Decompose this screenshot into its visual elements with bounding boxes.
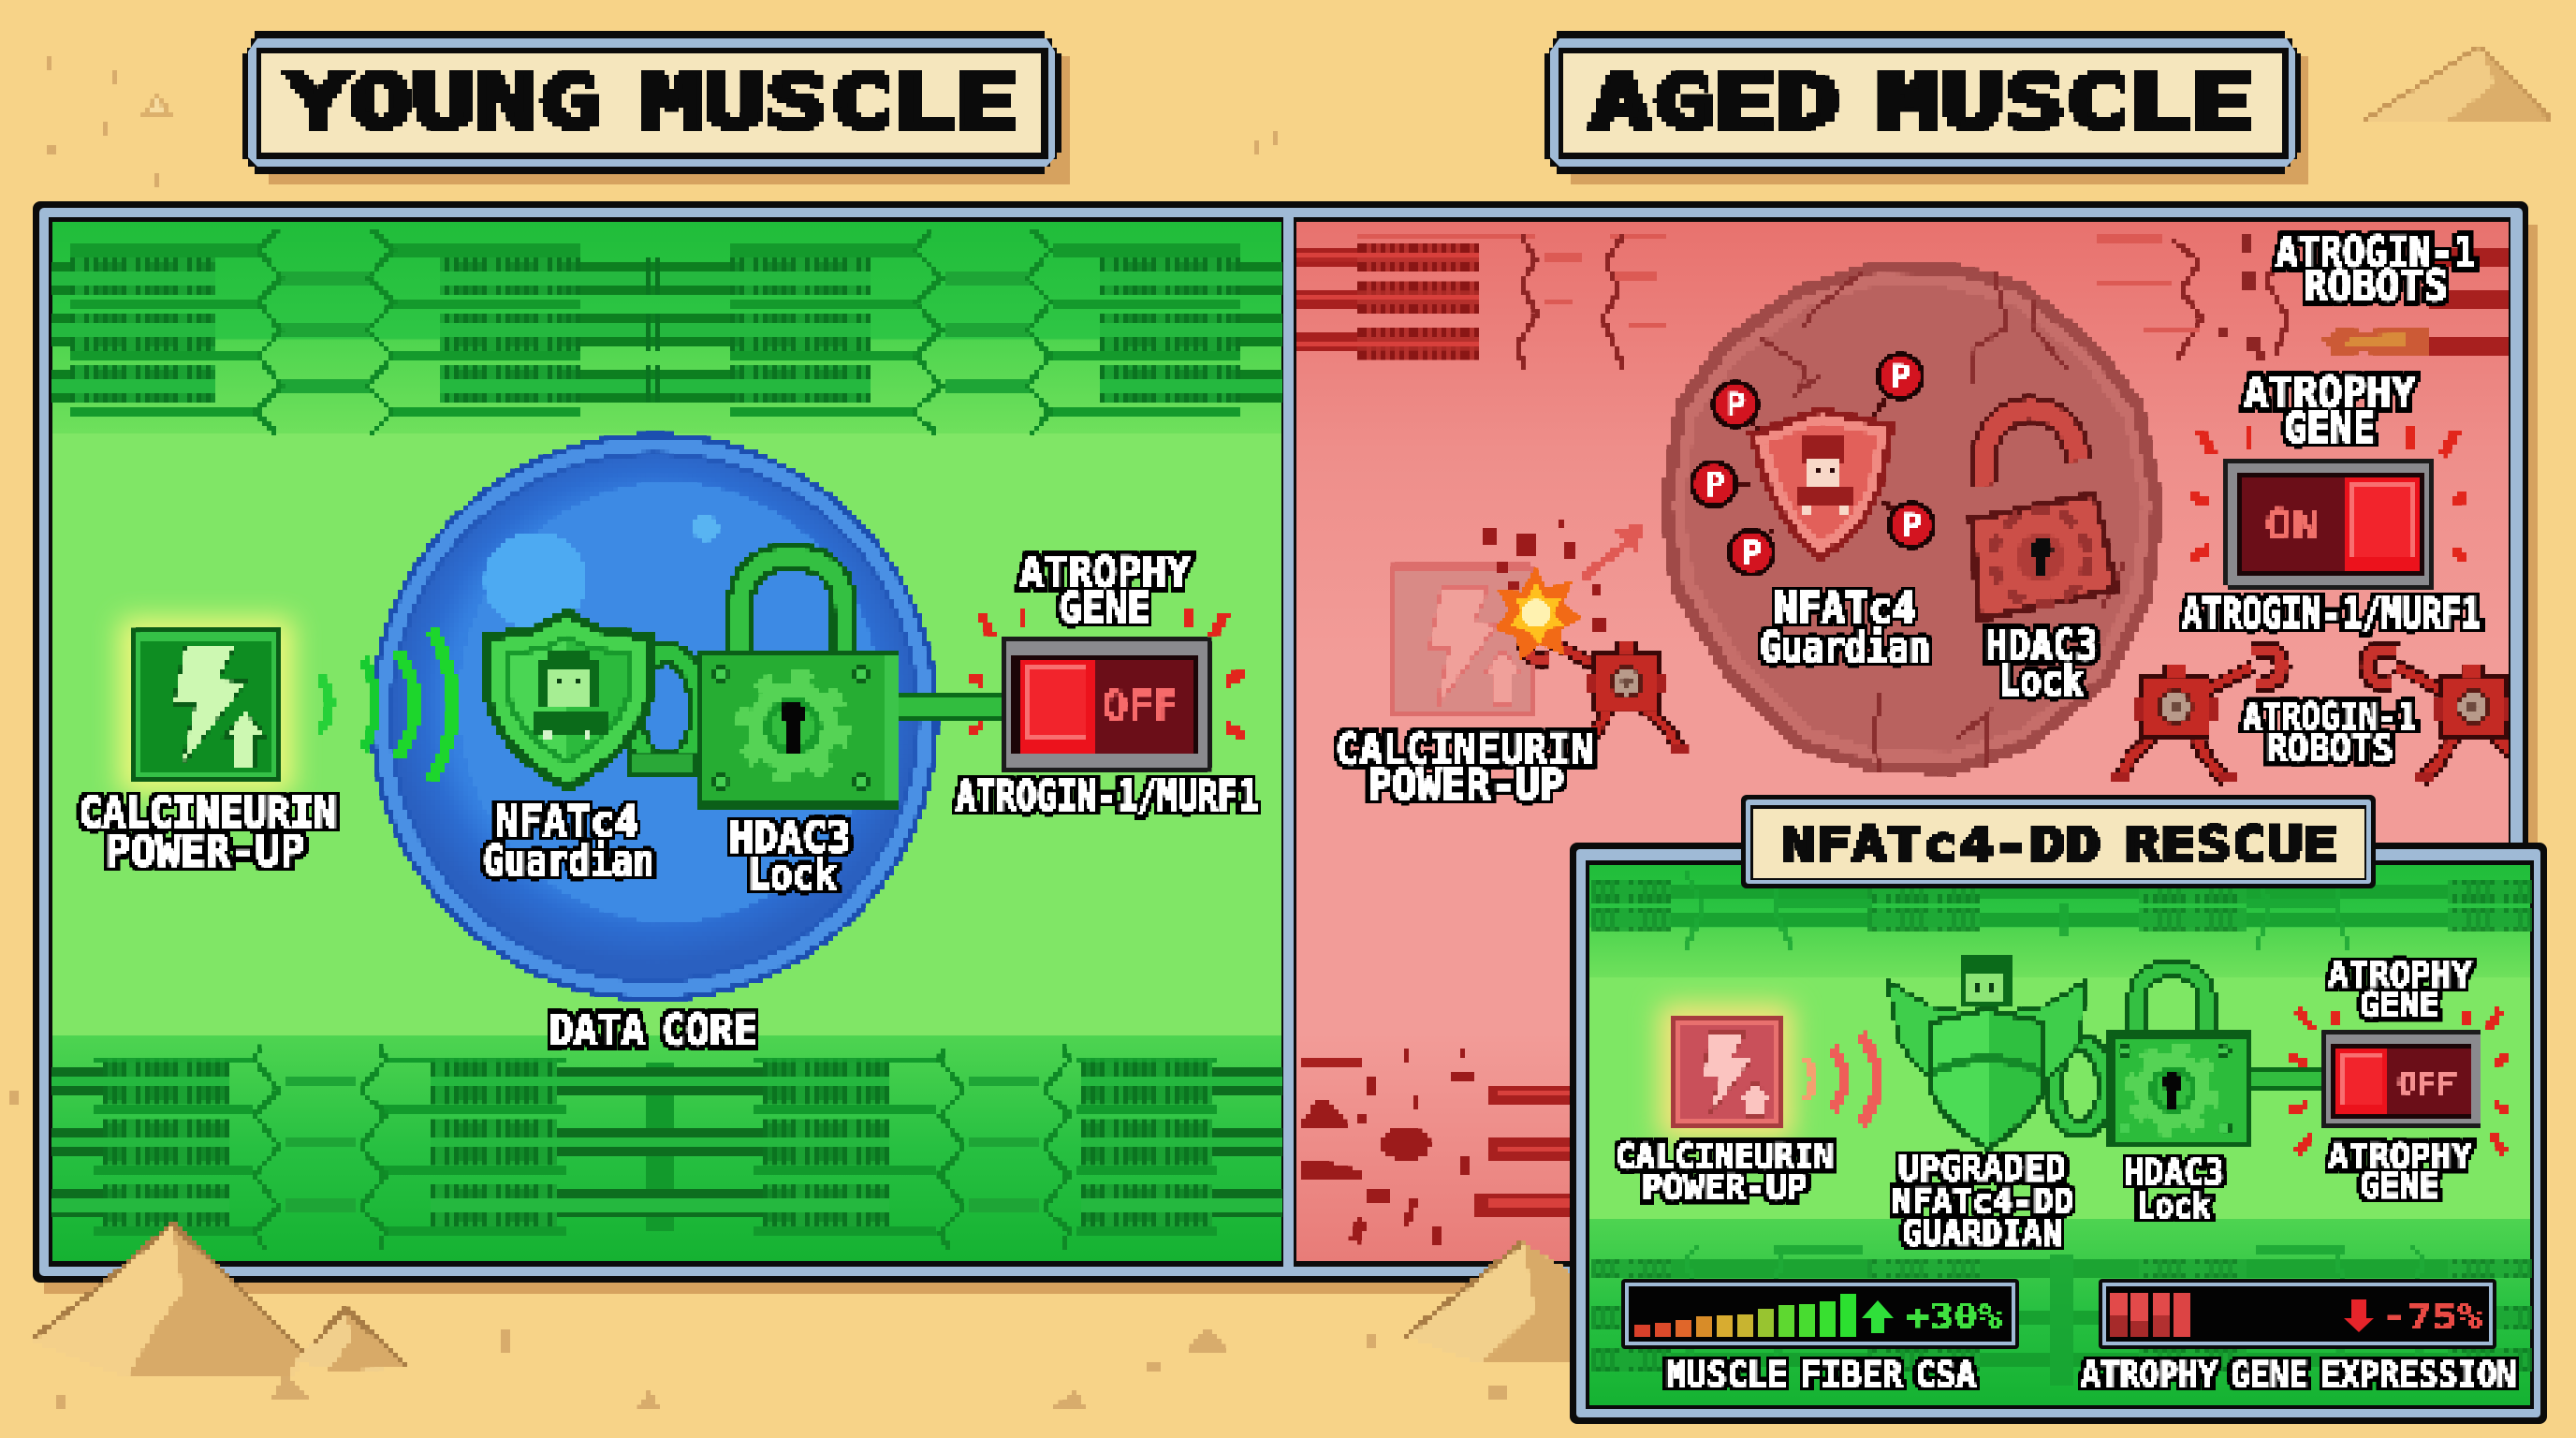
shield [1927,1006,2047,1152]
rescue calcineurin icon [1670,1015,1782,1129]
label: atrogin-1 lower: ATROGIN-1 [2243,696,2417,739]
label: power-up: POWER-UP [1368,760,1564,810]
rising bars [1634,1294,1856,1337]
atrogin-1 robot: lower right [2366,650,2537,783]
label: HDAC3: HDAC3 [2124,1152,2224,1193]
label: atrophy gene expression: ATROPHY GENE EXPRESSION [2081,1355,2516,1395]
main comparison frame [33,201,2538,1294]
up arrow [224,712,267,768]
label: data core: DATA CORE [549,1005,757,1055]
label: lock: Lock [2136,1186,2211,1226]
cracks [1760,271,2125,772]
title text: young muscle: YOUNG MUSCLE [286,61,1017,145]
connector bar to gene switch [900,691,1000,722]
label: guardian: GUARDIAN [1902,1213,2062,1254]
label: gene: GENE [1059,583,1150,633]
shield [483,608,654,793]
HDAC3 lock [697,557,900,808]
dune: bottom left small [295,1309,406,1372]
label: gene: GENE [2284,404,2376,453]
label: HDAC3: HDAC3 [729,813,851,862]
data core sphere [370,433,939,1002]
cracked data core [1660,262,2164,775]
label: calcineurin: CALCINEURIN [79,788,337,838]
panel: NFATc4-DD rescue [1570,795,2547,1424]
P marker 5 [1727,528,1776,577]
rescue title text: NFATc4-DD RESCUE [1780,817,2338,873]
panel: young muscle [52,222,1281,1261]
label: atrophy: ATROPHY [2244,368,2416,418]
explosion and debris [1484,520,1606,660]
dune mounds and speckles [7,56,1505,1411]
label: atrogin-1/murf1: ATROGIN-1/MURF1 [2182,589,2481,638]
label: atrophy lower: ATROPHY [2328,1137,2473,1177]
label: lock: Lock [748,850,837,900]
up arrow [1862,1300,1894,1333]
P marker 2 [1876,352,1925,401]
damaged fibres: top [1296,234,2509,370]
fading arrow [1580,524,1643,580]
wings [1887,981,2086,1086]
body [697,649,900,808]
label: power-up: POWER-UP [106,827,305,876]
gauge: muscle fiber CSA [1621,1279,2019,1349]
dune: centre bottom [1406,1242,1573,1364]
labels: rescue panel [1616,955,2516,1395]
muscle fibres: rescue bottom [1589,1245,2530,1390]
label: atrophy: ATROPHY [1019,548,1191,597]
rescue signal waves [1805,1035,1878,1123]
broken calcineurin power-up [1388,524,1643,718]
rescue HDAC3 lock [2108,969,2250,1148]
label: gene lower: GENE [2360,1166,2439,1206]
rescue gene switch: off [2321,1032,2482,1128]
gauge: atrophy gene expression [2099,1279,2496,1349]
on label: ON [2265,501,2320,549]
shackle [739,557,844,655]
P marker 5: P [1742,535,1763,573]
dune: small top left [140,94,176,118]
label: NFATc4-DD: NFATc4-DD [1892,1181,2073,1222]
muscle fibres: young bottom [52,1047,1281,1250]
rescue frame [1570,843,2547,1424]
title text: aged muscle: AGED MUSCLE [1589,61,2253,145]
figure [1797,436,1852,515]
calcineurin power-up icon [130,628,283,783]
rescue switch sparks [2291,1007,2510,1155]
label: calcineurin: CALCINEURIN [1616,1137,1834,1177]
rescue title plate [1741,795,2376,888]
down arrow [2344,1299,2374,1332]
switch sparks: on [2190,427,2467,564]
head [1960,957,2012,1008]
NFATc4 guardian shield and key [483,608,700,793]
keyhole [780,700,806,753]
sphere inner light [459,482,880,922]
label: atrophy upper: ATROPHY [2328,955,2473,995]
glow: rescue calcineurin [1659,1004,1793,1140]
labels: young panel [79,548,1258,1055]
label: upgraded: UPGRADED [1898,1149,2066,1189]
off label: OFF [2397,1064,2457,1101]
sphere highlight [484,515,719,629]
panel: aged muscle [1296,222,2537,1261]
label: robots lower: ROBOTS [2266,727,2393,770]
label: robots top: ROBOTS [2304,261,2448,311]
atrophy gene switch: on [2224,457,2436,588]
label: guardian: Guardian [1760,623,1930,672]
off label: OFF [1103,682,1178,730]
P marker 1 [1711,380,1760,429]
label: guardian: Guardian [483,836,654,886]
dune: bottom left large [31,1224,304,1378]
title: aged muscle [1544,31,2308,184]
label: NFATc4: NFATc4 [1774,583,1916,633]
lightning bolt [173,645,247,766]
phosphorylated shield [1714,376,1911,562]
broken shackle [1983,409,2078,485]
rescue connector bar [2250,1069,2321,1092]
loss value: -75% [2382,1297,2483,1337]
P marker 4: P [1902,507,1923,546]
key ring [629,653,700,776]
gear [744,678,842,775]
switch sparks [968,607,1245,741]
P marker 1: P [1726,387,1747,425]
label: muscle fiber CSA: MUSCLE FIBER CSA [1666,1355,1976,1395]
label: gene upper: GENE [2360,985,2439,1025]
atrogin-1 robot: lower left [2112,650,2282,783]
P marker 4 [1887,501,1936,550]
label: lock: Lock [1999,656,2084,706]
P links [1714,376,1911,552]
cracked HDAC3 lock [1968,409,2120,624]
atrophy gene switch: off [1000,638,1212,770]
label: atrogin-1/murf1: ATROGIN-1/MURF1 [956,771,1258,821]
atrogin-1 robot: attacker [1526,627,1687,754]
key ring [2054,1043,2106,1129]
label: HDAC3: HDAC3 [1985,621,2098,670]
body [1968,491,2120,624]
label: atrogin-1 top: ATROGIN-1 [2276,227,2476,277]
P marker 2: P [1891,359,1911,397]
signal waves [319,629,453,781]
muscle fibres: young top [52,229,1281,433]
labels: aged panel [1336,227,2481,810]
damaged fibres: bottom [1299,1049,1573,1245]
keyhole [2030,537,2053,577]
guardian figure [535,653,607,740]
P marker 3: P [1705,466,1725,505]
title: young muscle [242,31,1070,184]
gain value: +30% [1905,1297,2003,1337]
upgraded NFATc4-DD winged shield [1887,957,2106,1152]
muscle fibres: rescue top [1589,871,2530,950]
bolt [1704,1032,1752,1116]
label: NFATc4: NFATc4 [495,797,638,846]
screws [714,667,869,789]
P markers [1690,352,1936,577]
label: calcineurin: CALCINEURIN [1336,725,1594,774]
dune: top right [2365,46,2551,120]
label: power-up: POWER-UP [1642,1167,1808,1208]
up arrow [1739,1081,1771,1116]
falling bars [2110,1293,2190,1337]
P marker 3 [1690,460,1738,508]
shield [1748,406,1895,562]
glow: calcineurin power-up [119,618,294,794]
